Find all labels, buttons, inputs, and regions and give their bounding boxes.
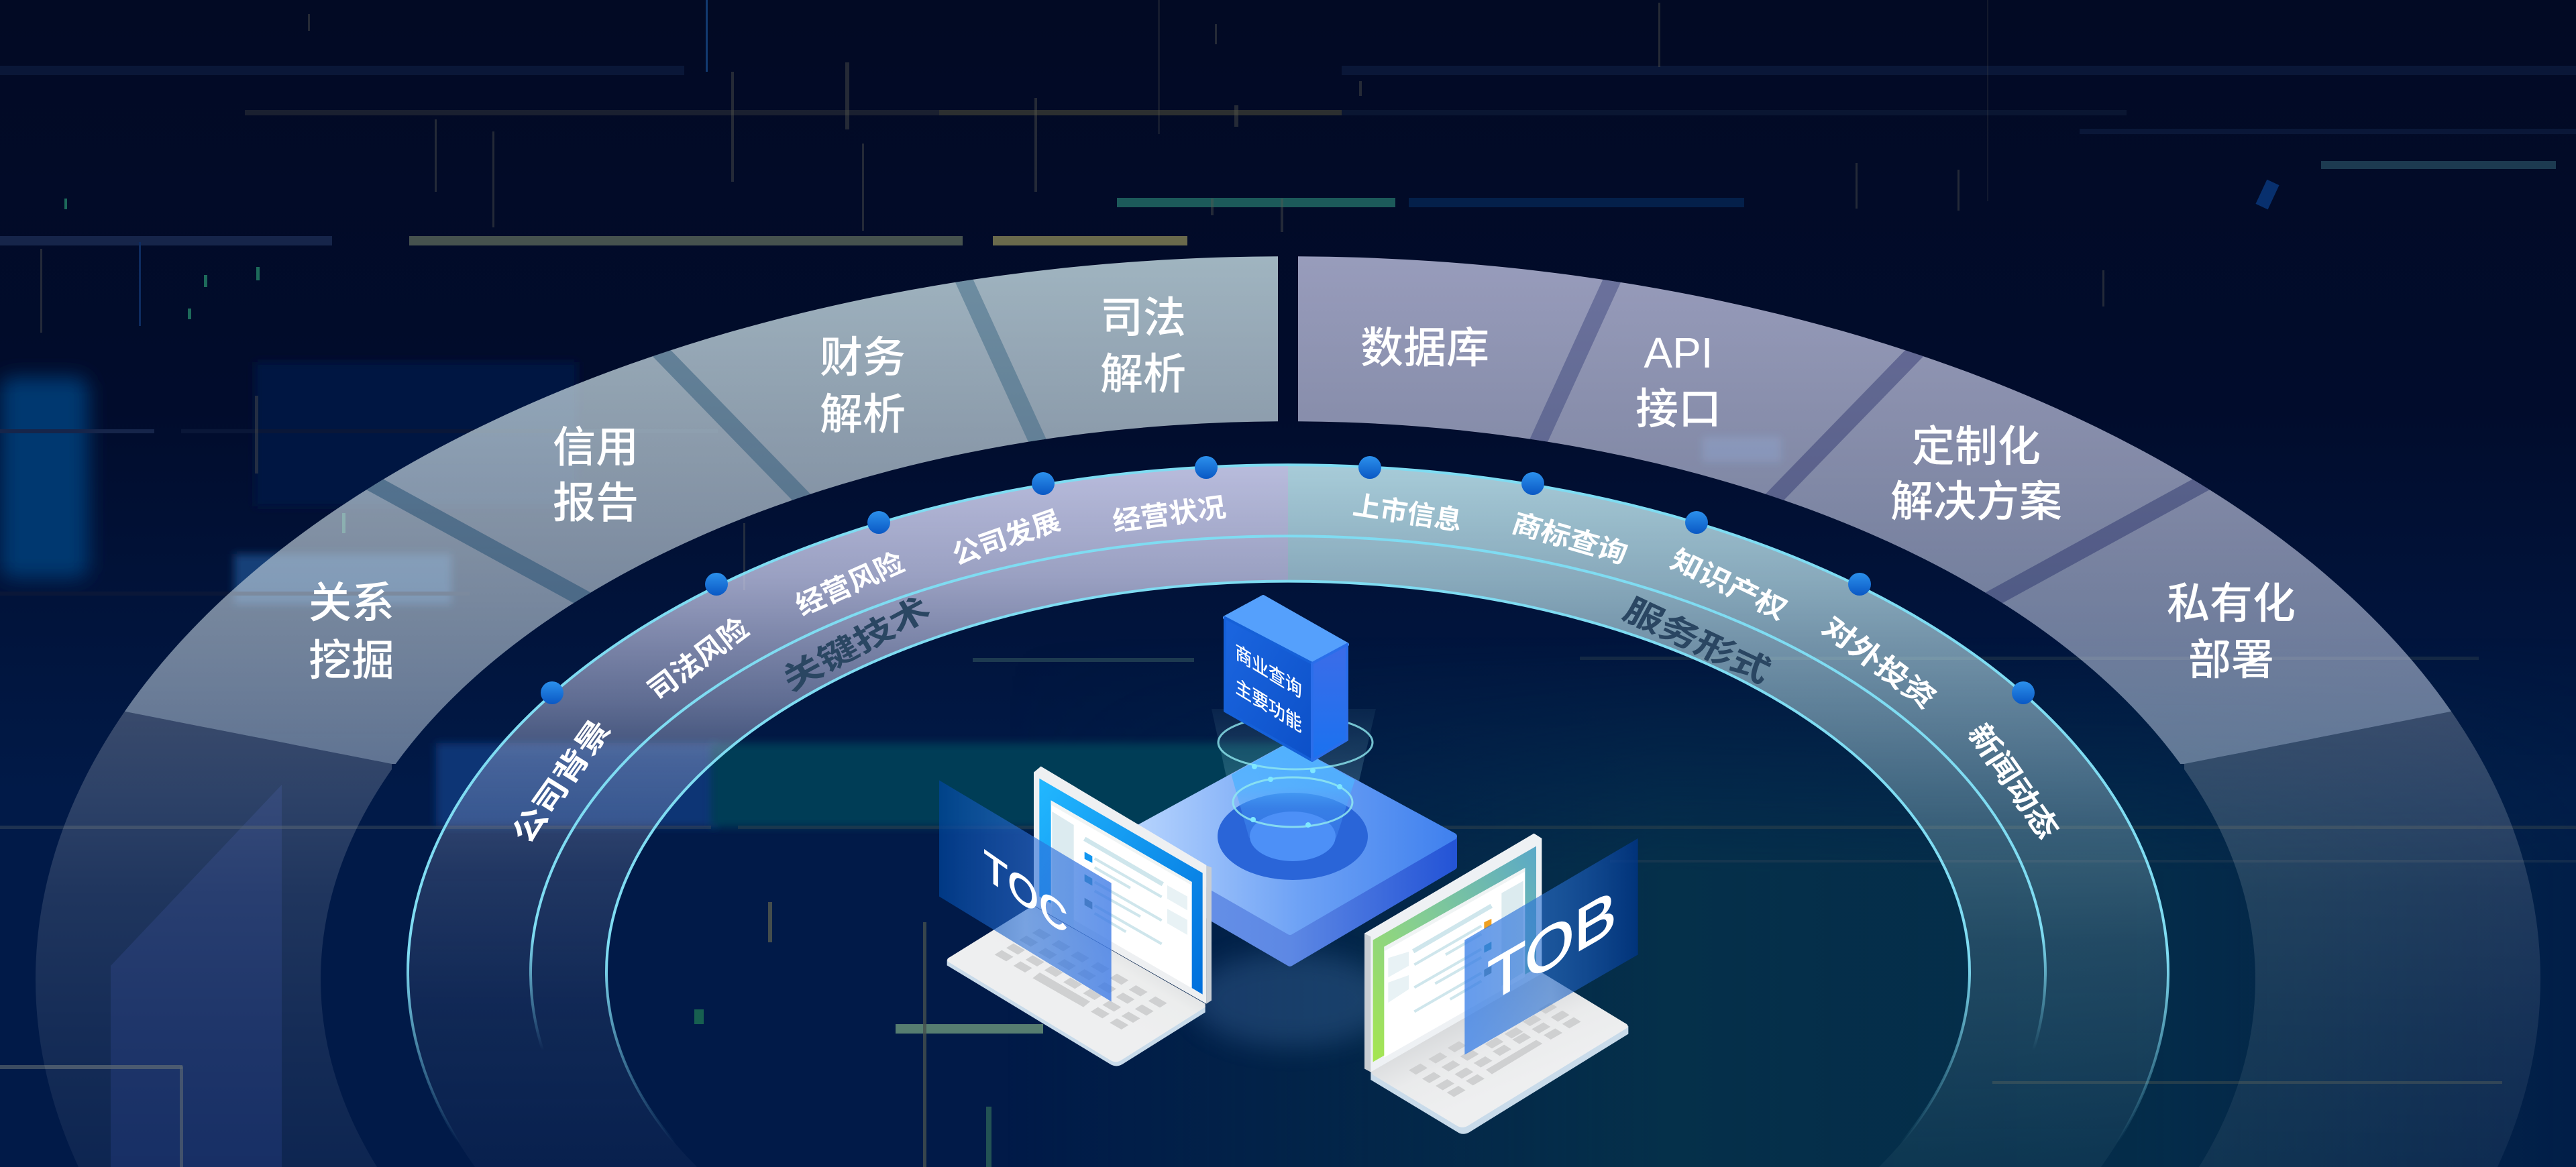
function cube: 主要功能 bbox=[1235, 675, 1302, 737]
outer arc labels: 接口 bbox=[1635, 385, 1721, 433]
TOC laptop base bbox=[947, 960, 1205, 1066]
faint light beam behind platform bbox=[1212, 709, 1376, 838]
outer arc right segments bbox=[1298, 256, 2451, 764]
TOC label: TOC bbox=[984, 841, 1069, 944]
inner band right half bbox=[1288, 466, 2167, 1167]
central platform illustration bbox=[1124, 597, 1454, 1046]
outer arc left segments bbox=[125, 256, 1278, 764]
outer arc labels: 司法 bbox=[1100, 294, 1186, 342]
outer arc lower dim band bbox=[36, 711, 2540, 1167]
outer arc labels: 解析 bbox=[1100, 350, 1186, 398]
outer arc labels: 信用 bbox=[553, 423, 639, 471]
TOB laptop screen bbox=[1364, 834, 1542, 1072]
outer arc labels: 私有化 bbox=[2167, 579, 2296, 628]
outer arc labels: 报告 bbox=[553, 479, 639, 527]
TOC laptop screen bbox=[1034, 767, 1206, 1004]
ring nodes bbox=[1250, 764, 1342, 828]
outer arc labels: 解决方案 bbox=[1890, 478, 2062, 526]
light beam on platform bbox=[1232, 746, 1355, 838]
inner arc labels: 公司发展 bbox=[949, 505, 1064, 571]
inner band cyan outline rings bbox=[408, 465, 2168, 1167]
inner arc labels: 经营风险 bbox=[790, 547, 909, 621]
function cube: 商业查询 bbox=[1235, 641, 1302, 703]
outer arc labels: 定制化 bbox=[1912, 423, 2041, 471]
outer arc labels: 挖掘 bbox=[309, 636, 394, 685]
TOB label: TOB bbox=[1487, 876, 1617, 1017]
inner arc labels: 知识产权 bbox=[1666, 545, 1792, 626]
TOB laptop base bbox=[1371, 1026, 1628, 1134]
platform glow bbox=[1191, 952, 1392, 1046]
inner arc labels: 对外投资 bbox=[1817, 610, 1942, 715]
inner arc labels: 商标查询 bbox=[1508, 508, 1631, 569]
inner arc labels: 公司背景 bbox=[506, 714, 617, 849]
band titles: 服务形式 bbox=[1617, 592, 1776, 690]
inner arc labels: 经营状况 bbox=[1110, 492, 1228, 537]
TOB laptop bbox=[1364, 834, 1638, 1134]
outer arc labels bbox=[309, 294, 2296, 685]
function cube bbox=[1225, 597, 1347, 761]
TOC laptop bbox=[939, 767, 1212, 1066]
rings bbox=[1218, 716, 1373, 827]
TOB overlay panel bbox=[1464, 838, 1638, 1055]
outer arc labels: 部署 bbox=[2188, 636, 2274, 684]
marker dots bbox=[541, 456, 2035, 704]
band titles: 关键技术 bbox=[776, 591, 936, 698]
band titles bbox=[776, 591, 1776, 698]
outer arc labels: API bbox=[1644, 329, 1713, 377]
segment dividers bbox=[362, 272, 2214, 602]
outer arc labels: 财务 bbox=[820, 333, 906, 382]
inner arc band bbox=[408, 456, 2168, 1167]
platform block bbox=[1124, 746, 1454, 963]
outer arc band bbox=[36, 256, 2540, 1167]
outer arc labels: 数据库 bbox=[1360, 324, 1489, 372]
inner arc labels: 新闻动态 bbox=[1962, 718, 2065, 844]
inner arc labels: 上市信息 bbox=[1351, 490, 1464, 537]
platform recess bbox=[1218, 793, 1368, 880]
outer arc labels: 关系 bbox=[309, 579, 394, 627]
outer arc labels: 解析 bbox=[820, 390, 906, 439]
inner arc labels bbox=[506, 490, 2065, 849]
inner band left half bbox=[409, 466, 1288, 1151]
TOC overlay panel bbox=[939, 780, 1112, 1001]
inner arc labels: 司法风险 bbox=[642, 612, 755, 707]
